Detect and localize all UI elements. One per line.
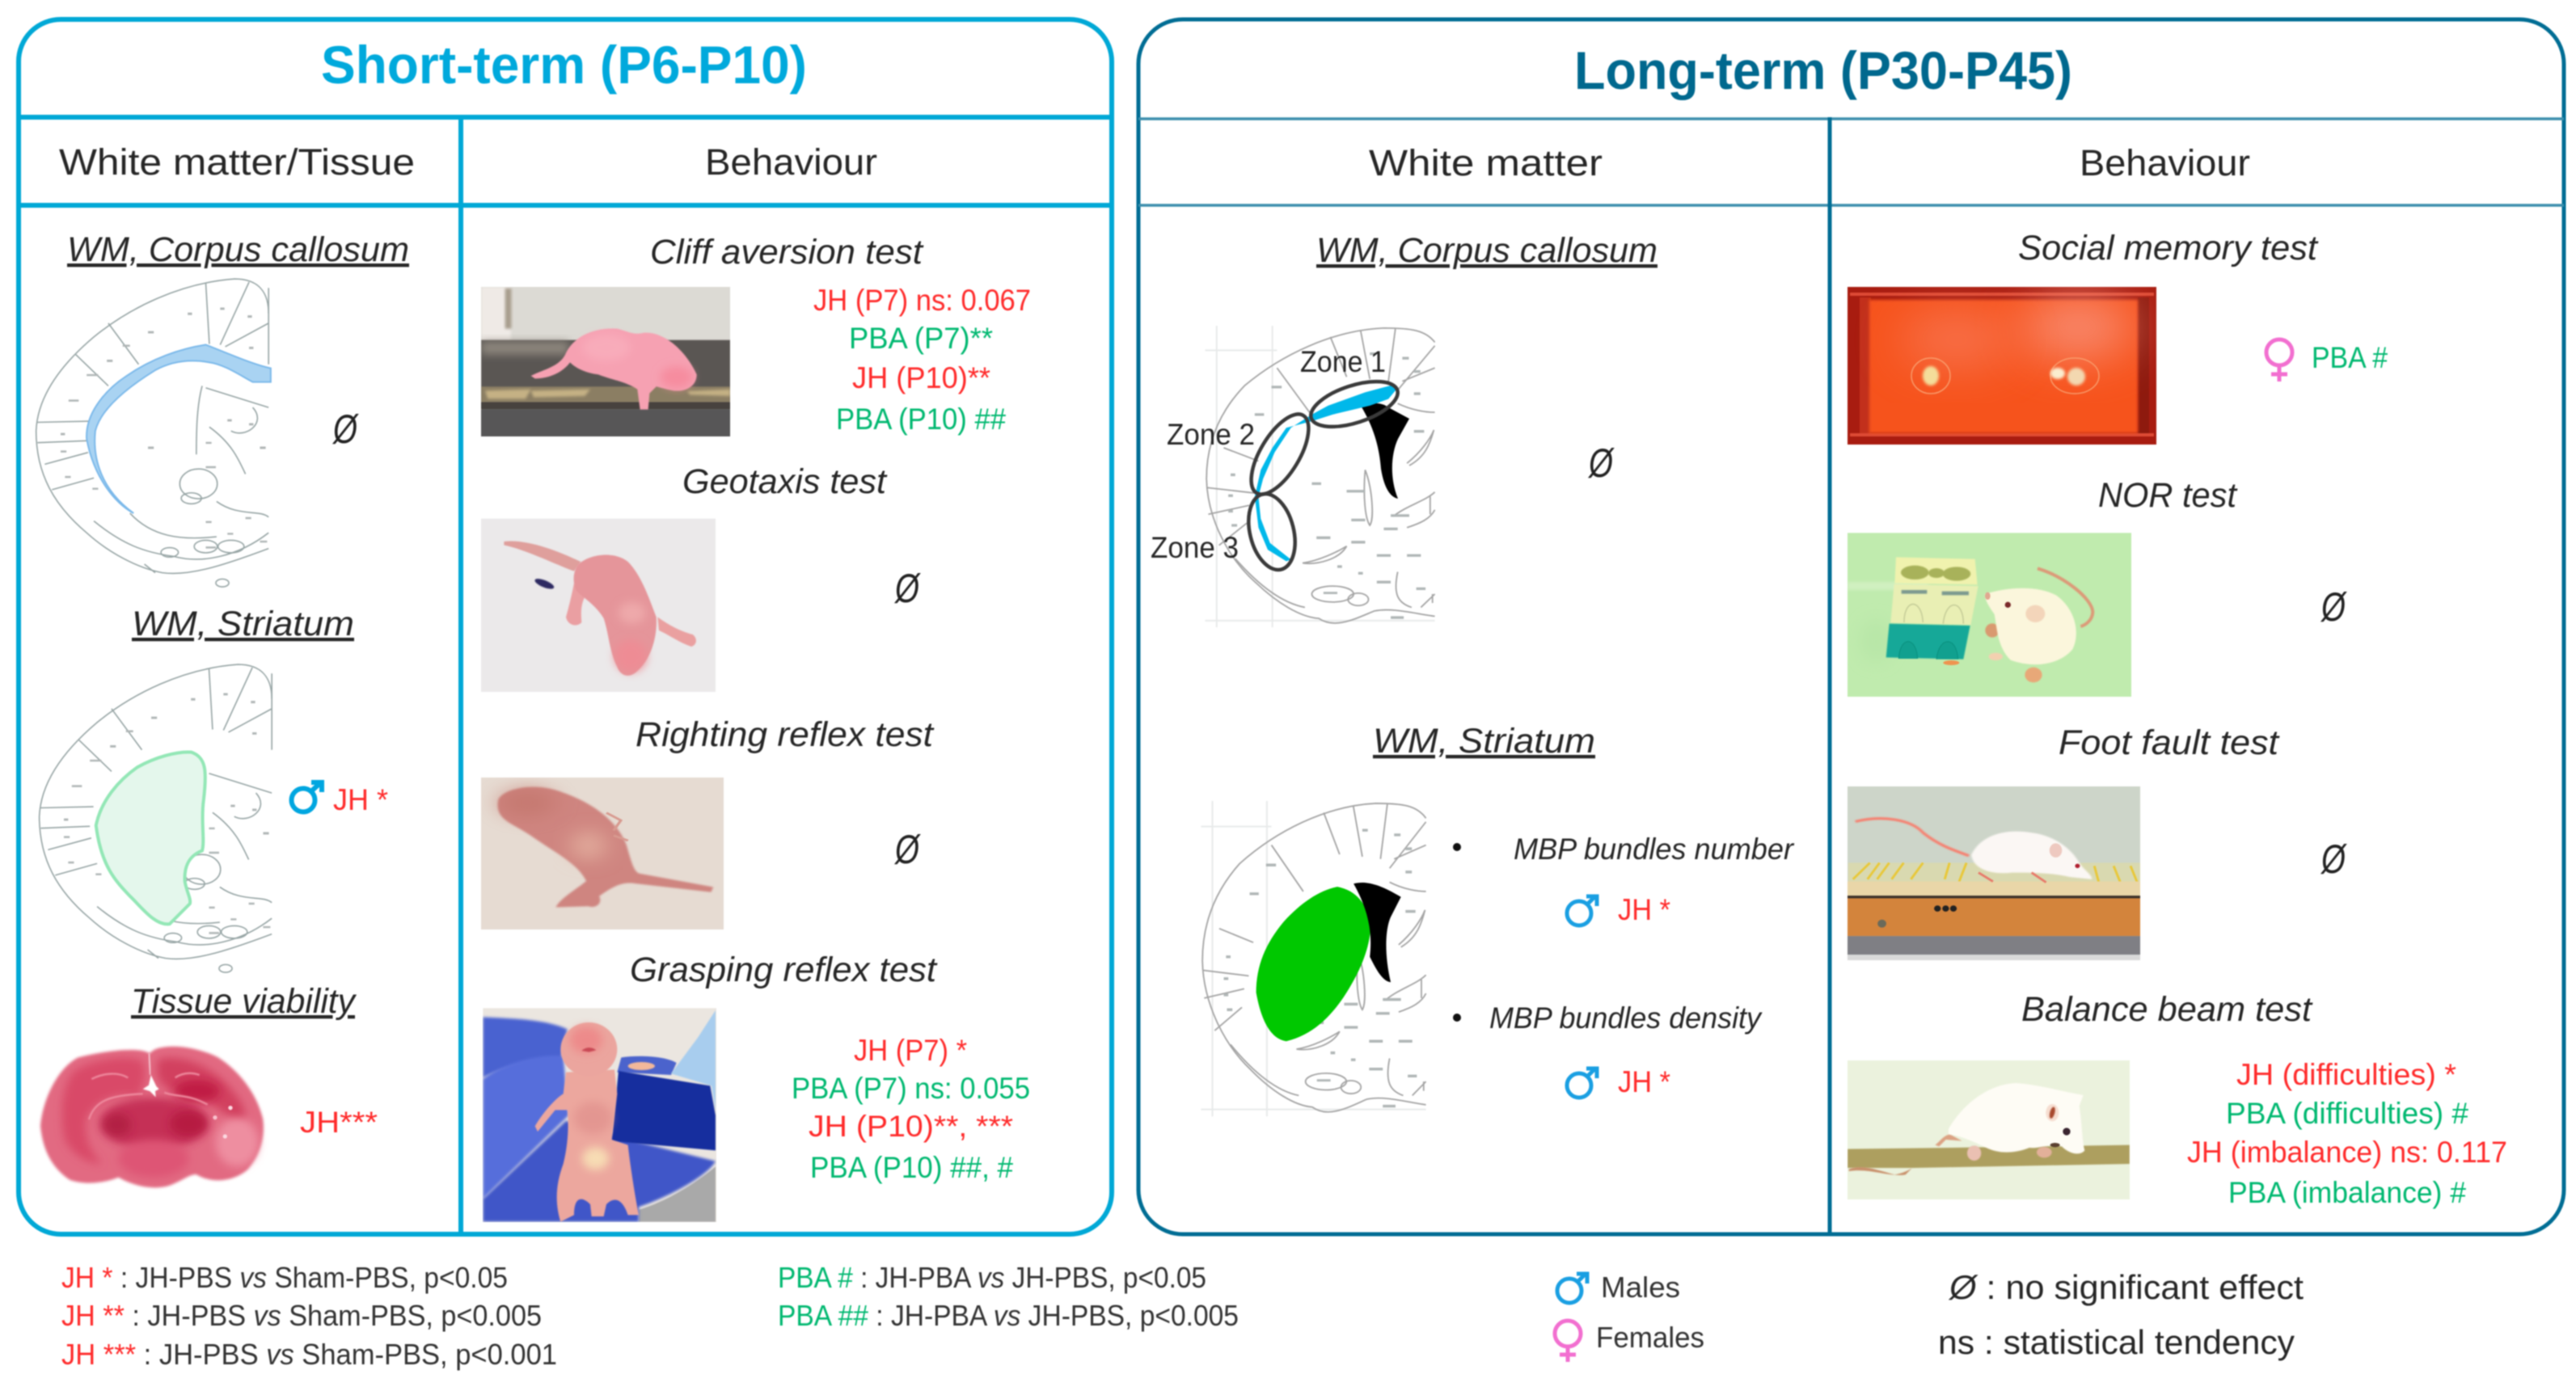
title long-term: Long-term (P30-P45) [1574, 40, 2072, 100]
result line: PBA (P10) ##, # [810, 1151, 1013, 1184]
result line: JH (P10)** [852, 361, 990, 394]
male symbol [291, 782, 322, 811]
result line: JH (P7) ns: 0.067 [813, 284, 1031, 317]
result line: JH (imbalance) ns: 0.117 [2187, 1136, 2507, 1169]
photo: foot fault [1848, 786, 2140, 961]
column heading: white matter/tissue: White matter/Tissue [59, 141, 415, 183]
result line: JH (P10)**, *** [809, 1110, 1013, 1143]
result line: PBA (P7)** [849, 322, 993, 355]
photo: geotaxis pup [481, 519, 716, 693]
legend line: PBA # : JH-PBA vs JH-PBS, p<0.05 [778, 1261, 1206, 1294]
corpus callosum highlight [87, 345, 271, 513]
female symbol [2266, 339, 2292, 381]
result line: PBA (P10) ## [836, 403, 1006, 436]
zone ellipses [1240, 373, 1403, 575]
heading: WM striatum: WM, Striatum [1373, 722, 1595, 761]
test heading: geotaxis: Geotaxis test [682, 462, 888, 501]
column heading: behaviour: Behaviour [2080, 142, 2250, 183]
legend: symbols meaning [1938, 1268, 2304, 1361]
result line: JH (difficulties) * [2236, 1058, 2456, 1091]
measure: MBP bundles density [1453, 1001, 1763, 1098]
result: social memory: PBA # [2312, 341, 2388, 374]
legend line: PBA ## : JH-PBA vs JH-PBS, p<0.005 [778, 1299, 1239, 1332]
male symbol [1567, 896, 1597, 925]
no effect symbol: long-term corpus callosum: Ø [1587, 440, 1615, 486]
no effect symbol: foot fault: Ø [2320, 837, 2347, 882]
heading: WM striatum: WM, Striatum [132, 605, 354, 643]
results: cliff aversion [813, 284, 1031, 436]
result: tissue viability JH: JH*** [300, 1106, 378, 1139]
result line: JH (P7) * [854, 1034, 967, 1067]
test heading: NOR: NOR test [2098, 476, 2238, 515]
title short-term: Short-term (P6-P10) [321, 35, 807, 95]
zone label: Zone 1 [1300, 345, 1386, 378]
photo: novel object recognition [1848, 533, 2132, 698]
photo: righting reflex pup [481, 778, 724, 929]
no effect symbol: geotaxis: Ø [893, 566, 921, 611]
panel: long-term [1138, 19, 2564, 1234]
test heading: social memory: Social memory test [2018, 229, 2319, 268]
male symbol [1567, 1068, 1597, 1098]
zone label: Zone 2 [1167, 418, 1255, 451]
legend line: JH ** : JH-PBS vs Sham-PBS, p<0.005 [61, 1299, 542, 1332]
no effect symbol: NOR: Ø [2320, 584, 2347, 630]
result: JH * [1618, 1065, 1670, 1098]
legend line: ns : statistical tendency [1938, 1323, 2295, 1361]
ventricle [1353, 883, 1401, 982]
photo: grasping reflex pup [483, 1008, 716, 1222]
female symbol [1555, 1321, 1581, 1362]
legend line: Ø : no significant effect [1948, 1268, 2304, 1306]
photo: cliff aversion pup [481, 287, 730, 436]
ventricle [1361, 403, 1409, 499]
photo: social memory arena [1848, 287, 2156, 445]
column heading: white matter: White matter [1369, 142, 1603, 183]
striatum highlight [96, 752, 205, 924]
legend line: JH *** : JH-PBS vs Sham-PBS, p<0.001 [61, 1338, 557, 1371]
stained brain section [40, 1047, 264, 1187]
results: grasping reflex [792, 1034, 1030, 1184]
label males: Males [1601, 1271, 1680, 1304]
legend: sex symbols [1555, 1271, 1704, 1362]
panel frame short-term [19, 19, 1112, 1234]
column and row dividers short-term [19, 117, 1112, 1234]
bullet [1453, 843, 1461, 851]
result line: PBA (difficulties) # [2226, 1097, 2468, 1130]
no effect symbol: righting reflex: Ø [893, 827, 921, 872]
test heading: foot fault: Foot fault test [2059, 723, 2280, 762]
brain atlas with three corpus callosum zones [1151, 326, 1435, 627]
dividers long-term [1138, 119, 2564, 205]
test heading: cliff aversion: Cliff aversion test [650, 233, 924, 272]
zone label: Zone 3 [1151, 531, 1239, 564]
column heading: behaviour: Behaviour [705, 141, 877, 183]
result line: PBA (P7) ns: 0.055 [792, 1072, 1030, 1105]
corpus callosum band [1255, 385, 1396, 561]
result: striatum JH: JH * [333, 783, 388, 816]
measure: MBP bundles number [1453, 832, 1795, 926]
heading: WM corpus callosum: WM, Corpus callosum [67, 230, 409, 269]
panel frame long-term [1138, 19, 2564, 1234]
test heading: grasping reflex: Grasping reflex test [630, 951, 938, 989]
panel: short-term [19, 19, 1112, 1234]
striatum fill [1256, 887, 1370, 1041]
vertical divider long-term [1827, 117, 1832, 1234]
male symbol [1557, 1273, 1587, 1303]
brain atlas with corpus callosum highlighted [36, 279, 271, 587]
legend line: JH * : JH-PBS vs Sham-PBS, p<0.05 [61, 1261, 508, 1294]
measure label: MBP bundles number [1514, 832, 1795, 866]
no effect symbol: corpus callosum: Ø [332, 407, 359, 452]
heading: WM corpus callosum: WM, Corpus callosum [1316, 231, 1658, 270]
test heading: righting reflex: Righting reflex test [636, 715, 935, 754]
legend: PBA significance levels [778, 1261, 1239, 1332]
test heading: balance beam: Balance beam test [2021, 990, 2313, 1029]
measure label: MBP bundles density [1489, 1001, 1763, 1035]
result: JH * [1618, 893, 1670, 926]
heading: tissue viability: Tissue viability [131, 982, 357, 1021]
brain atlas with striatum in green [1201, 801, 1426, 1116]
photo: balance beam [1848, 1060, 2130, 1200]
legend: JH significance levels [61, 1261, 557, 1371]
bullet [1453, 1014, 1461, 1022]
results: balance beam [2187, 1058, 2507, 1209]
result line: PBA (imbalance) # [2228, 1176, 2466, 1209]
label females: Females [1596, 1321, 1704, 1354]
brain atlas with striatum highlighted [40, 664, 272, 972]
